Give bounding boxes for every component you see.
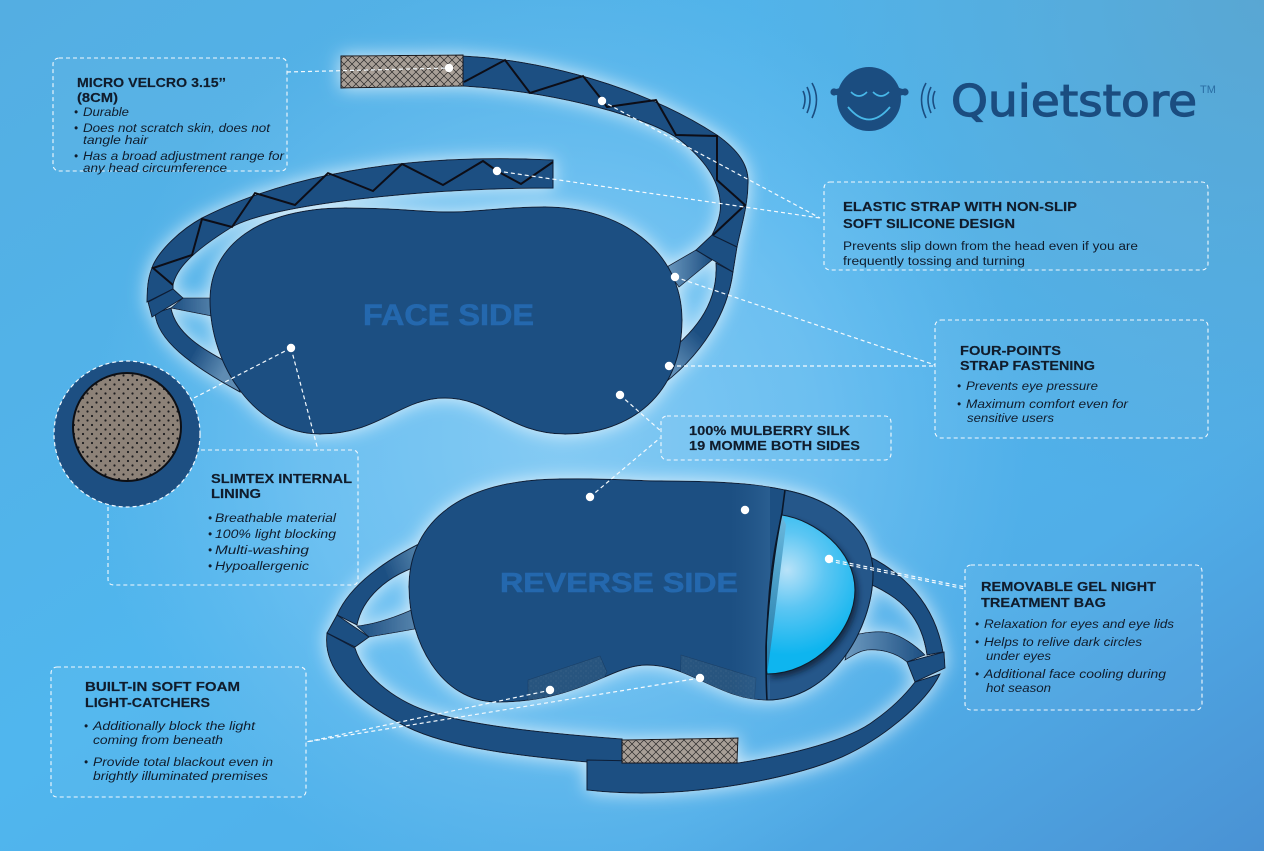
callout: gel bag: Additional face cooling during [983, 669, 1167, 681]
callout: micro velcro: any head circumference [83, 163, 227, 175]
trademark: TM [1200, 84, 1216, 96]
magnified lining circle [54, 361, 200, 507]
callout: slimtex lining: • [208, 529, 212, 541]
callout: elastic strap: frequently tossing and turning [843, 256, 1025, 268]
marker dots [287, 64, 833, 694]
mask outline over shading [767, 490, 873, 700]
callout: four-points fastening: sensitive users [967, 413, 1054, 425]
right outer loop [860, 552, 943, 655]
callout: four-points fastening: • [957, 381, 961, 393]
callout: slimtex lining: 100% light blocking [215, 529, 337, 541]
logo: quietstore [803, 67, 1216, 131]
right connector [845, 632, 925, 662]
wordmark: Quietstore [951, 76, 1197, 127]
callout: gel bag: under eyes [986, 651, 1051, 663]
callout: four-points fastening: STRAP FASTENING [960, 358, 1095, 373]
left tab [327, 615, 369, 647]
callout: gel bag: • [975, 637, 979, 649]
gel pack [767, 515, 855, 674]
callout: slimtex lining: Multi-washing [215, 545, 310, 557]
callout: foam light-catchers: brightly illuminated premises [93, 771, 268, 783]
callout: slimtex lining: Hypoallergenic [215, 561, 309, 573]
callout: micro velcro: tangle hair [83, 135, 149, 147]
callout: micro velcro: Has a broad adjustment range for [83, 151, 285, 163]
label: reverse side: REVERSE SIDE [500, 567, 738, 598]
left upper loop [337, 541, 425, 625]
right strap tab and loop [655, 235, 737, 390]
callout: foam light-catchers: coming from beneath [93, 735, 223, 747]
callout: slimtex lining: Breathable material [215, 513, 337, 525]
callout: gel bag: • [975, 619, 979, 631]
callout: mulberry silk: 100% MULBERRY SILK [689, 423, 851, 438]
callout: micro velcro [53, 58, 287, 175]
seam shading [738, 484, 770, 700]
callout: foam light-catchers: Additionally block the light [92, 721, 256, 733]
left strap tab and loop [148, 289, 240, 392]
callout: four-points fastening: • [957, 399, 961, 411]
callout: four-points fastening: FOUR-POINTS [960, 343, 1061, 358]
callout: four-points fastening: Prevents eye pressure [966, 381, 1098, 393]
cap shading [770, 490, 872, 700]
callout: foam light-catchers: BUILT-IN SOFT FOAM [85, 679, 240, 694]
callout: gel bag: hot season [986, 683, 1051, 695]
label: face side: FACE SIDE [363, 299, 534, 332]
callout: micro velcro: (8CM) [77, 90, 118, 105]
velcro patch [341, 55, 463, 88]
callout: micro velcro: • [74, 151, 78, 163]
gel shadow [770, 519, 858, 678]
callout: foam light-catchers: LIGHT-CATCHERS [85, 695, 210, 710]
callout: elastic strap [824, 182, 1208, 270]
callout: gel bag: Relaxation for eyes and eye lids [984, 619, 1174, 631]
callout: gel bag [965, 565, 1202, 710]
foam light-catchers [528, 655, 756, 705]
callout: elastic strap: SOFT SILICONE DESIGN [843, 216, 1015, 231]
left connector [357, 606, 425, 637]
callout: slimtex lining: SLIMTEX INTERNAL [211, 471, 352, 486]
callout: foam light-catchers: • [84, 721, 88, 733]
callout: slimtex lining [108, 450, 358, 585]
callout: gel bag: Helps to relive dark circles [984, 637, 1142, 649]
reverse side mask assembly [327, 479, 945, 793]
pocket edge highlight [767, 515, 786, 674]
callout: four-points fastening: Maximum comfort even for [966, 399, 1129, 411]
callout: gel bag: • [975, 669, 979, 681]
callout: micro velcro: MICRO VELCRO 3.15’’ [77, 75, 226, 90]
callout: micro velcro: • [74, 107, 78, 119]
callout: four-points fastening [935, 320, 1208, 438]
icon: sound waves [803, 83, 935, 118]
lower elastic strap [147, 159, 553, 302]
gel bag pocket [738, 484, 872, 700]
callout: foam light-catchers: Provide total blackout even in [93, 757, 273, 769]
connector lines [190, 68, 965, 742]
callout: elastic strap: Prevents slip down from the head even if you are [843, 241, 1138, 253]
callout: gel bag: REMOVABLE GEL NIGHT [981, 579, 1156, 594]
face side mask body [210, 207, 682, 434]
callout: slimtex lining: • [208, 513, 212, 525]
callout: micro velcro: Durable [83, 107, 129, 119]
upper elastic strap [463, 56, 748, 247]
velcro patch reverse [622, 738, 738, 763]
callout: slimtex lining: LINING [211, 486, 261, 501]
callout: elastic strap: ELASTIC STRAP WITH NON-SLIP [843, 199, 1077, 214]
callout: slimtex lining: • [208, 545, 212, 557]
pocket seam [766, 490, 785, 700]
callout: foam light-catchers: • [84, 757, 88, 769]
callout: mulberry silk [661, 416, 891, 460]
bottom strap right part [587, 674, 940, 793]
callout: slimtex lining: • [208, 561, 212, 573]
callout: gel bag: TREATMENT BAG [981, 595, 1106, 610]
callout: foam light-catchers [51, 667, 306, 797]
callout: micro velcro: Does not scratch skin, does not [83, 123, 271, 135]
icon: sleeping face [830, 67, 909, 131]
bottom strap left part [327, 633, 622, 763]
face side mask assembly [147, 55, 748, 434]
callout: micro velcro: • [74, 123, 78, 135]
reverse side mask body [409, 479, 873, 702]
callout: mulberry silk: 19 MOMME BOTH SIDES [689, 438, 860, 453]
right tab [907, 652, 945, 682]
